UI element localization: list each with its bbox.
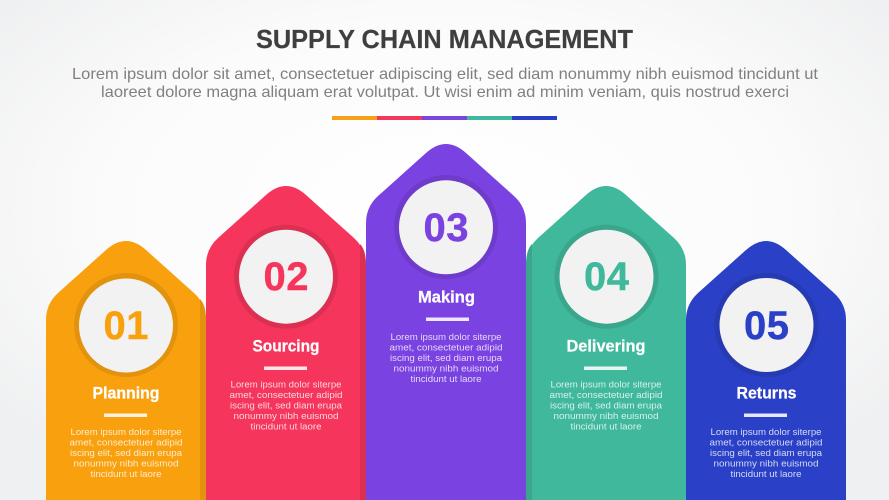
panel: 03 making: 03 bbox=[424, 206, 468, 250]
panel: 01 planning: tincidunt ut laore bbox=[90, 469, 162, 479]
panel: 04 delivering: Lorem ipsum dolor siterpe bbox=[550, 380, 662, 390]
panel: 04 delivering: Delivering bbox=[566, 338, 646, 356]
panel: 01 planning: 01 bbox=[104, 304, 148, 348]
panel: 05 returns: 05 bbox=[744, 304, 789, 348]
panel: 05 returns: amet, consectetuer adipid bbox=[710, 438, 822, 448]
panel: 05 returns: tincidunt ut laore bbox=[730, 469, 802, 479]
panel: 05 returns: nonummy nibh euismod bbox=[714, 458, 818, 468]
panel: 03 making: tincidunt ut laore bbox=[410, 374, 482, 384]
title: SUPPLY CHAIN MANAGEMENT bbox=[256, 26, 633, 54]
panel: 05 returns: Returns bbox=[736, 384, 796, 402]
panel: 02 sourcing: iscing elit, sed diam erupa bbox=[230, 400, 342, 410]
panel: 04 delivering: 04 bbox=[584, 255, 630, 299]
panel: 03 making: iscing elit, sed diam erupa bbox=[390, 353, 502, 363]
panel: 03 making: Lorem ipsum dolor siterpe bbox=[390, 332, 502, 342]
panel: 02 sourcing: tincidunt ut laore bbox=[250, 422, 322, 432]
panel: 02 sourcing: amet, consectetuer adipid bbox=[230, 390, 342, 400]
panel: 04 delivering bbox=[526, 186, 686, 500]
panel: 05 returns: iscing elit, sed diam erupa bbox=[710, 448, 822, 458]
panel: 02 sourcing bbox=[206, 186, 366, 500]
subtitle text block: Lorem ipsum dolor sit amet, consectetuer adipiscing elit, sed diam nonummy nibh euismod tincidunt ut bbox=[72, 66, 819, 83]
panel: 05 returns bbox=[686, 241, 846, 500]
panel: 03 making bbox=[366, 144, 526, 500]
panel: 02 sourcing: nonummy nibh euismod bbox=[234, 411, 338, 421]
panel: 04 delivering: amet, consectetuer adipid bbox=[550, 390, 662, 400]
panel: 01 planning: nonummy nibh euismod bbox=[74, 458, 178, 468]
panel: 01 planning: amet, consectetuer adipid bbox=[70, 438, 182, 448]
panel: 01 planning: iscing elit, sed diam erupa bbox=[70, 448, 182, 458]
panel: 03 making: amet, consectetuer adipid bbox=[390, 342, 502, 352]
panel: 04 delivering: nonummy nibh euismod bbox=[554, 411, 658, 421]
panel: 05 returns: Lorem ipsum dolor siterpe bbox=[710, 427, 822, 437]
panel: 04 delivering: tincidunt ut laore bbox=[570, 422, 642, 432]
panel: 03 making: nonummy nibh euismod bbox=[394, 364, 498, 374]
subtitle text block bbox=[72, 66, 819, 101]
panel: 01 planning: Planning bbox=[92, 384, 160, 402]
panel: 02 sourcing: 02 bbox=[264, 255, 308, 299]
panel: 01 planning bbox=[46, 241, 206, 500]
subtitle text block: laoreet dolore magna aliquam erat volutpat. Ut wisi enim ad minim veniam, quis nostrud exerci bbox=[101, 84, 789, 101]
multicolour divider bbox=[332, 116, 557, 120]
panel: 04 delivering: iscing elit, sed diam erupa bbox=[550, 400, 662, 410]
panel: 01 planning: Lorem ipsum dolor siterpe bbox=[70, 427, 182, 437]
panel: 03 making: Making bbox=[418, 288, 475, 306]
panel: 02 sourcing: Lorem ipsum dolor siterpe bbox=[230, 380, 342, 390]
panel: 02 sourcing: Sourcing bbox=[252, 338, 320, 356]
